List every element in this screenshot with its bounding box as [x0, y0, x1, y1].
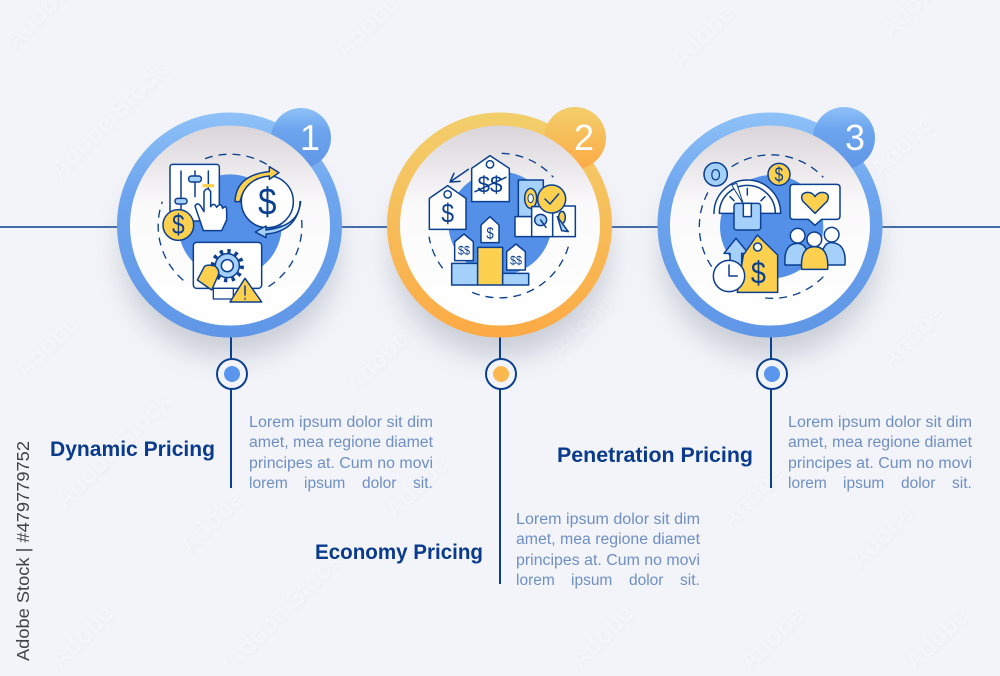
description 1: dolor	[362, 475, 396, 492]
description 2	[516, 511, 701, 589]
badge 3	[813, 107, 875, 169]
badge 1	[271, 108, 331, 168]
description 3: dolor	[901, 475, 935, 492]
number 2: 2	[574, 117, 594, 158]
infographic: Adobe	[874, 299, 949, 374]
infographic: Adobe Stock	[49, 386, 177, 514]
description 1: lorem	[249, 475, 288, 492]
description 3: Lorem ipsum dolor sit dim	[788, 414, 972, 431]
connector line and marker 2	[486, 335, 516, 584]
icon: penetration pricing: $	[775, 164, 783, 186]
panel: step 3 penetration pricing	[557, 107, 973, 492]
connector line and marker 1	[217, 335, 247, 488]
number 3: 3	[845, 117, 865, 158]
infographic: Adobe	[44, 599, 119, 674]
horizontal timeline line	[0, 226, 1000, 228]
description 1: principes at. Cum no movi	[249, 455, 433, 472]
description 2: sit.	[680, 572, 700, 589]
icon: economy pricing: $$	[477, 172, 503, 198]
connector line and marker 3	[757, 335, 787, 488]
infographic: Adobe Stock	[219, 546, 347, 674]
icon: penetration pricing: O	[711, 165, 721, 184]
icon: economy pricing: $	[441, 198, 454, 228]
panel: step 1 dynamic pricing	[50, 108, 434, 492]
description 3: lorem	[788, 475, 827, 492]
infographic: Adobe	[899, 601, 974, 676]
description 1: amet, mea regione diamet	[249, 434, 434, 451]
description 3: amet, mea regione diamet	[788, 434, 973, 451]
icon: penetration pricing: $	[751, 254, 766, 290]
panel: step 2 economy pricing	[315, 107, 701, 589]
description 1: Lorem ipsum dolor sit dim	[249, 414, 433, 431]
icon: economy pricing: $$	[458, 244, 470, 258]
white disc 2	[400, 126, 600, 326]
description 1: ipsum	[304, 475, 345, 492]
label: Economy Pricing: Economy Pricing	[315, 541, 483, 564]
infographic: Adobe	[734, 601, 809, 676]
white disc 3	[670, 126, 870, 326]
infographic: Adobe	[564, 599, 639, 674]
infographic: Adobe	[664, 0, 739, 74]
description 2: dolor	[629, 572, 663, 589]
label: Dynamic Pricing: Dynamic Pricing	[50, 438, 215, 461]
description 1	[249, 414, 434, 492]
icon: dynamic pricing: $	[258, 180, 276, 223]
description 3: sit.	[952, 475, 972, 492]
description 2: ipsum	[571, 572, 612, 589]
description 2: amet, mea regione diamet	[516, 531, 701, 548]
label: Penetration Pricing: Penetration Pricing	[557, 444, 753, 467]
number 1: 1	[300, 117, 320, 158]
description 2: lorem	[516, 572, 555, 589]
infographic: Adobe	[544, 289, 619, 364]
infographic: Adobe	[844, 499, 919, 574]
infographic: Adobe Stock	[44, 56, 172, 184]
description 2: principes at. Cum no movi	[516, 552, 700, 569]
icon: economy pricing: $$	[510, 254, 522, 268]
badge 2	[544, 107, 606, 169]
description 3	[788, 414, 973, 492]
infographic: Adobe	[9, 309, 84, 384]
description 3: ipsum	[843, 475, 884, 492]
infographic: Adobe	[174, 484, 249, 559]
infographic: Adobe	[714, 459, 789, 534]
icon: penetration pricing	[699, 155, 845, 298]
infographic: Adobe	[339, 324, 414, 399]
ring 3	[658, 112, 882, 338]
icon: economy pricing: $	[486, 225, 494, 242]
icon: dynamic pricing	[158, 154, 302, 302]
icon: dynamic pricing: $	[172, 209, 185, 240]
ring 1	[117, 112, 342, 338]
white disc 1	[130, 126, 330, 326]
infographic: Adobe	[379, 449, 454, 524]
infographic: Adobe	[864, 109, 939, 184]
stock credit: Adobe Stock | #479779752	[13, 441, 33, 661]
icon: economy pricing	[429, 153, 575, 298]
description 1: sit.	[413, 475, 433, 492]
ring 2	[387, 112, 612, 338]
description 2: Lorem ipsum dolor sit dim	[516, 511, 700, 528]
description 3: principes at. Cum no movi	[788, 455, 972, 472]
